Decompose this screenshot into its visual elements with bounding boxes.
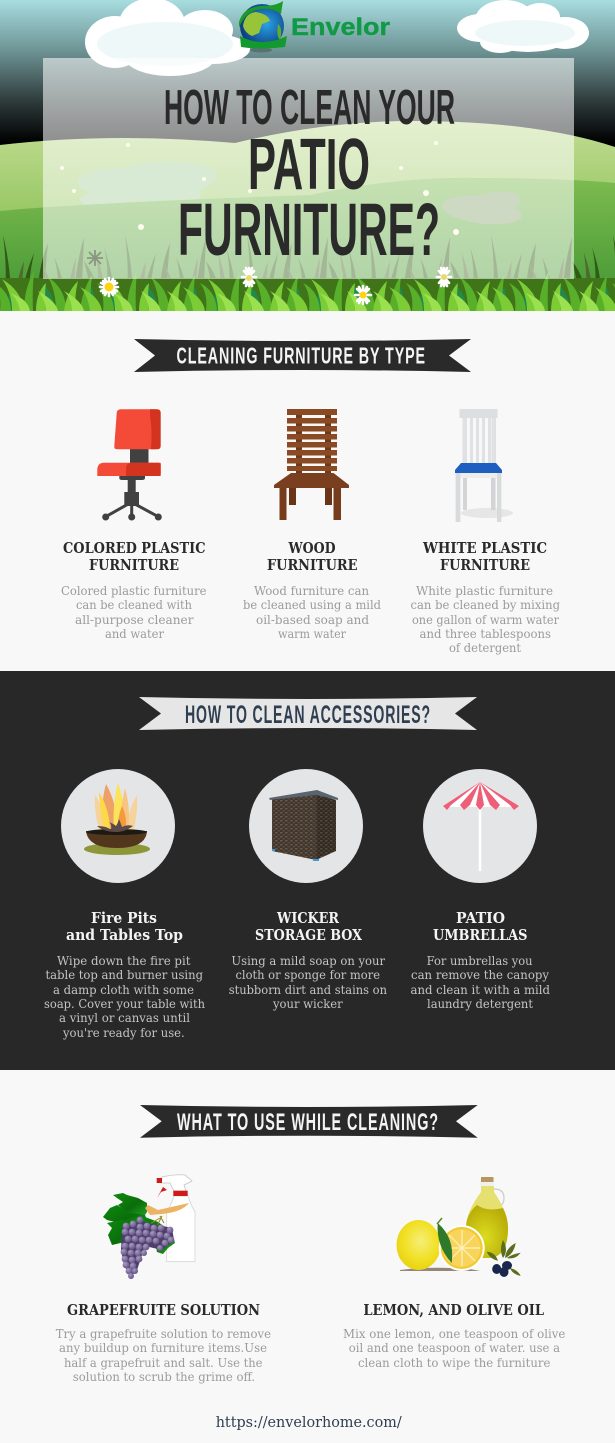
card: grapefruite solution — [56, 1302, 271, 1384]
heading ribbon: cleaning furniture by type — [134, 339, 471, 372]
icon: fire pit — [61, 769, 175, 883]
olive sprig — [487, 1240, 521, 1276]
oil bottle — [494, 1189, 504, 1207]
card: patio umbrellas: PATIO — [456, 910, 505, 927]
icon: wooden chair — [274, 409, 349, 520]
heading ribbon: cleaning furniture by type: CLEANING FURNITURE BY TYPE — [176, 342, 426, 368]
grape cluster — [121, 1221, 174, 1277]
card: patio umbrellas: and clean it with a mild — [410, 982, 550, 997]
card: wood furniture: be cleaned using a mild — [243, 597, 381, 612]
logo: Envelor — [239, 1, 390, 52]
card: patio umbrellas: can remove the canopy — [411, 967, 550, 982]
card: white plastic furniture — [410, 540, 560, 655]
card: wicker storage box: cloth or sponge for more — [236, 967, 380, 982]
grass — [0, 231, 615, 311]
card: wood furniture: Wood furniture can — [254, 583, 369, 598]
card: white plastic furniture: White plastic furniture — [416, 583, 553, 598]
card: grapefruite solution: half a grapefruit and salt. Use the — [64, 1355, 262, 1370]
lemon half — [439, 1225, 485, 1271]
card: lemon and olive oil: clean cloth to wipe the furniture — [358, 1355, 550, 1370]
card: wood furniture — [243, 540, 381, 641]
tiny hill flowers — [60, 141, 459, 235]
icon: globe with ribbons — [239, 1, 287, 52]
heading ribbon: how to clean accessories — [139, 697, 477, 730]
card: patio umbrellas — [410, 910, 550, 1011]
heading ribbon: what to use while cleaning: WHAT TO USE WHILE CLEANING? — [177, 1109, 439, 1136]
footer url: https://envelorhome.com/ — [216, 1413, 403, 1431]
card: fire pits and tables top: a vinyl or canvas until — [59, 1010, 190, 1025]
heading ribbon: how to clean accessories: HOW TO CLEAN ACCESSORIES? — [185, 701, 431, 729]
card: white plastic furniture: and three tablespoons — [420, 626, 551, 641]
card: grapefruite solution: GRAPEFRUITE SOLUTION — [67, 1302, 260, 1319]
title: PATIO — [248, 124, 370, 205]
translucent title panel — [43, 58, 574, 279]
card: wood furniture: FURNITURE — [267, 557, 358, 574]
leaves — [113, 1193, 147, 1215]
panel: how to clean accessories — [0, 671, 615, 1070]
panel: what to use while cleaning — [56, 1105, 565, 1384]
card: lemon and olive oil: Mix one lemon, one teaspoon of olive — [343, 1326, 565, 1341]
wordmark: Envelor — [291, 14, 390, 41]
card: grapefruite solution: solution to scrub the grime off. — [73, 1369, 255, 1384]
card: fire pits and tables top — [44, 910, 205, 1040]
heading ribbon: what to use while cleaning — [140, 1105, 478, 1138]
card: white plastic furniture: WHITE PLASTIC — [422, 540, 547, 557]
card: fire pits and tables top: soap. Cover your table with — [44, 996, 205, 1011]
clouds — [85, 0, 589, 76]
panel: cleaning furniture by type — [61, 339, 560, 655]
card: wood furniture: WOOD — [288, 540, 336, 557]
card: fire pits and tables top: you're ready for use. — [62, 1025, 185, 1040]
card: colored plastic furniture: Colored plastic furniture — [61, 583, 206, 598]
card: wicker storage box: STORAGE BOX — [255, 927, 363, 944]
card: wicker storage box: stubborn dirt and stains on — [229, 982, 387, 997]
card: lemon and olive oil: LEMON, AND OLIVE OIL — [363, 1302, 544, 1319]
icon: red office chair — [97, 409, 162, 520]
card: white plastic furniture: of detergent — [449, 640, 521, 655]
card: fire pits and tables top: Wipe down the fire pit — [57, 953, 190, 968]
icon: white chair with blue seat — [455, 409, 513, 522]
card: white plastic furniture: can be cleaned by mixing — [410, 597, 560, 612]
card: patio umbrellas: UMBRELLAS — [433, 927, 528, 944]
card: wicker storage box: WICKER — [276, 910, 340, 927]
card: colored plastic furniture: COLORED PLASTIC — [63, 540, 206, 557]
card: colored plastic furniture — [61, 540, 206, 641]
card: colored plastic furniture: and water — [105, 626, 164, 641]
card: fire pits and tables top: table top and burner using — [46, 967, 203, 982]
card: colored plastic furniture: can be cleaned with — [76, 597, 192, 612]
card: fire pits and tables top: a damp cloth with some — [53, 982, 194, 997]
card: fire pits and tables top: and Tables Top — [66, 927, 183, 944]
card: patio umbrellas: For umbrellas you — [427, 953, 533, 968]
card: lemon and olive oil: oil and one teaspoon of water. use a — [349, 1340, 560, 1355]
card: grapefruite solution: any buildup on furniture items.Use — [59, 1340, 267, 1355]
card: fire pits and tables top: Fire Pits — [91, 910, 157, 927]
card: lemon and olive oil — [343, 1302, 565, 1370]
icon: patio umbrella — [423, 769, 537, 883]
icon: wicker storage box — [249, 769, 363, 883]
title — [164, 80, 455, 271]
spray bottle — [167, 1196, 195, 1262]
stem — [145, 1203, 189, 1215]
card: wood furniture: oil-based soap and — [256, 612, 369, 627]
icon: lemon and olive oil — [396, 1177, 521, 1277]
hills — [0, 121, 615, 240]
card: wicker storage box — [229, 910, 387, 1011]
card: white plastic furniture: one gallon of warm water — [412, 612, 559, 627]
card: white plastic furniture: FURNITURE — [440, 557, 530, 574]
leaf — [438, 1223, 452, 1263]
daisies — [87, 250, 451, 304]
lemon — [400, 1268, 480, 1271]
card: wood furniture: warm water — [278, 626, 346, 641]
card: wicker storage box: Using a mild soap on your — [231, 953, 385, 968]
card: wicker storage box: your wicker — [272, 996, 343, 1011]
card: patio umbrellas: laundry detergent — [427, 996, 533, 1011]
card: grapefruite solution: Try a grapefruite solution to remove — [56, 1326, 271, 1341]
header scene: sky, clouds, hills and grass — [0, 0, 615, 311]
icon: grapes and spray bottle — [103, 1175, 195, 1279]
card: colored plastic furniture: FURNITURE — [89, 557, 179, 574]
card: colored plastic furniture: all-purpose cleaner — [75, 612, 194, 627]
